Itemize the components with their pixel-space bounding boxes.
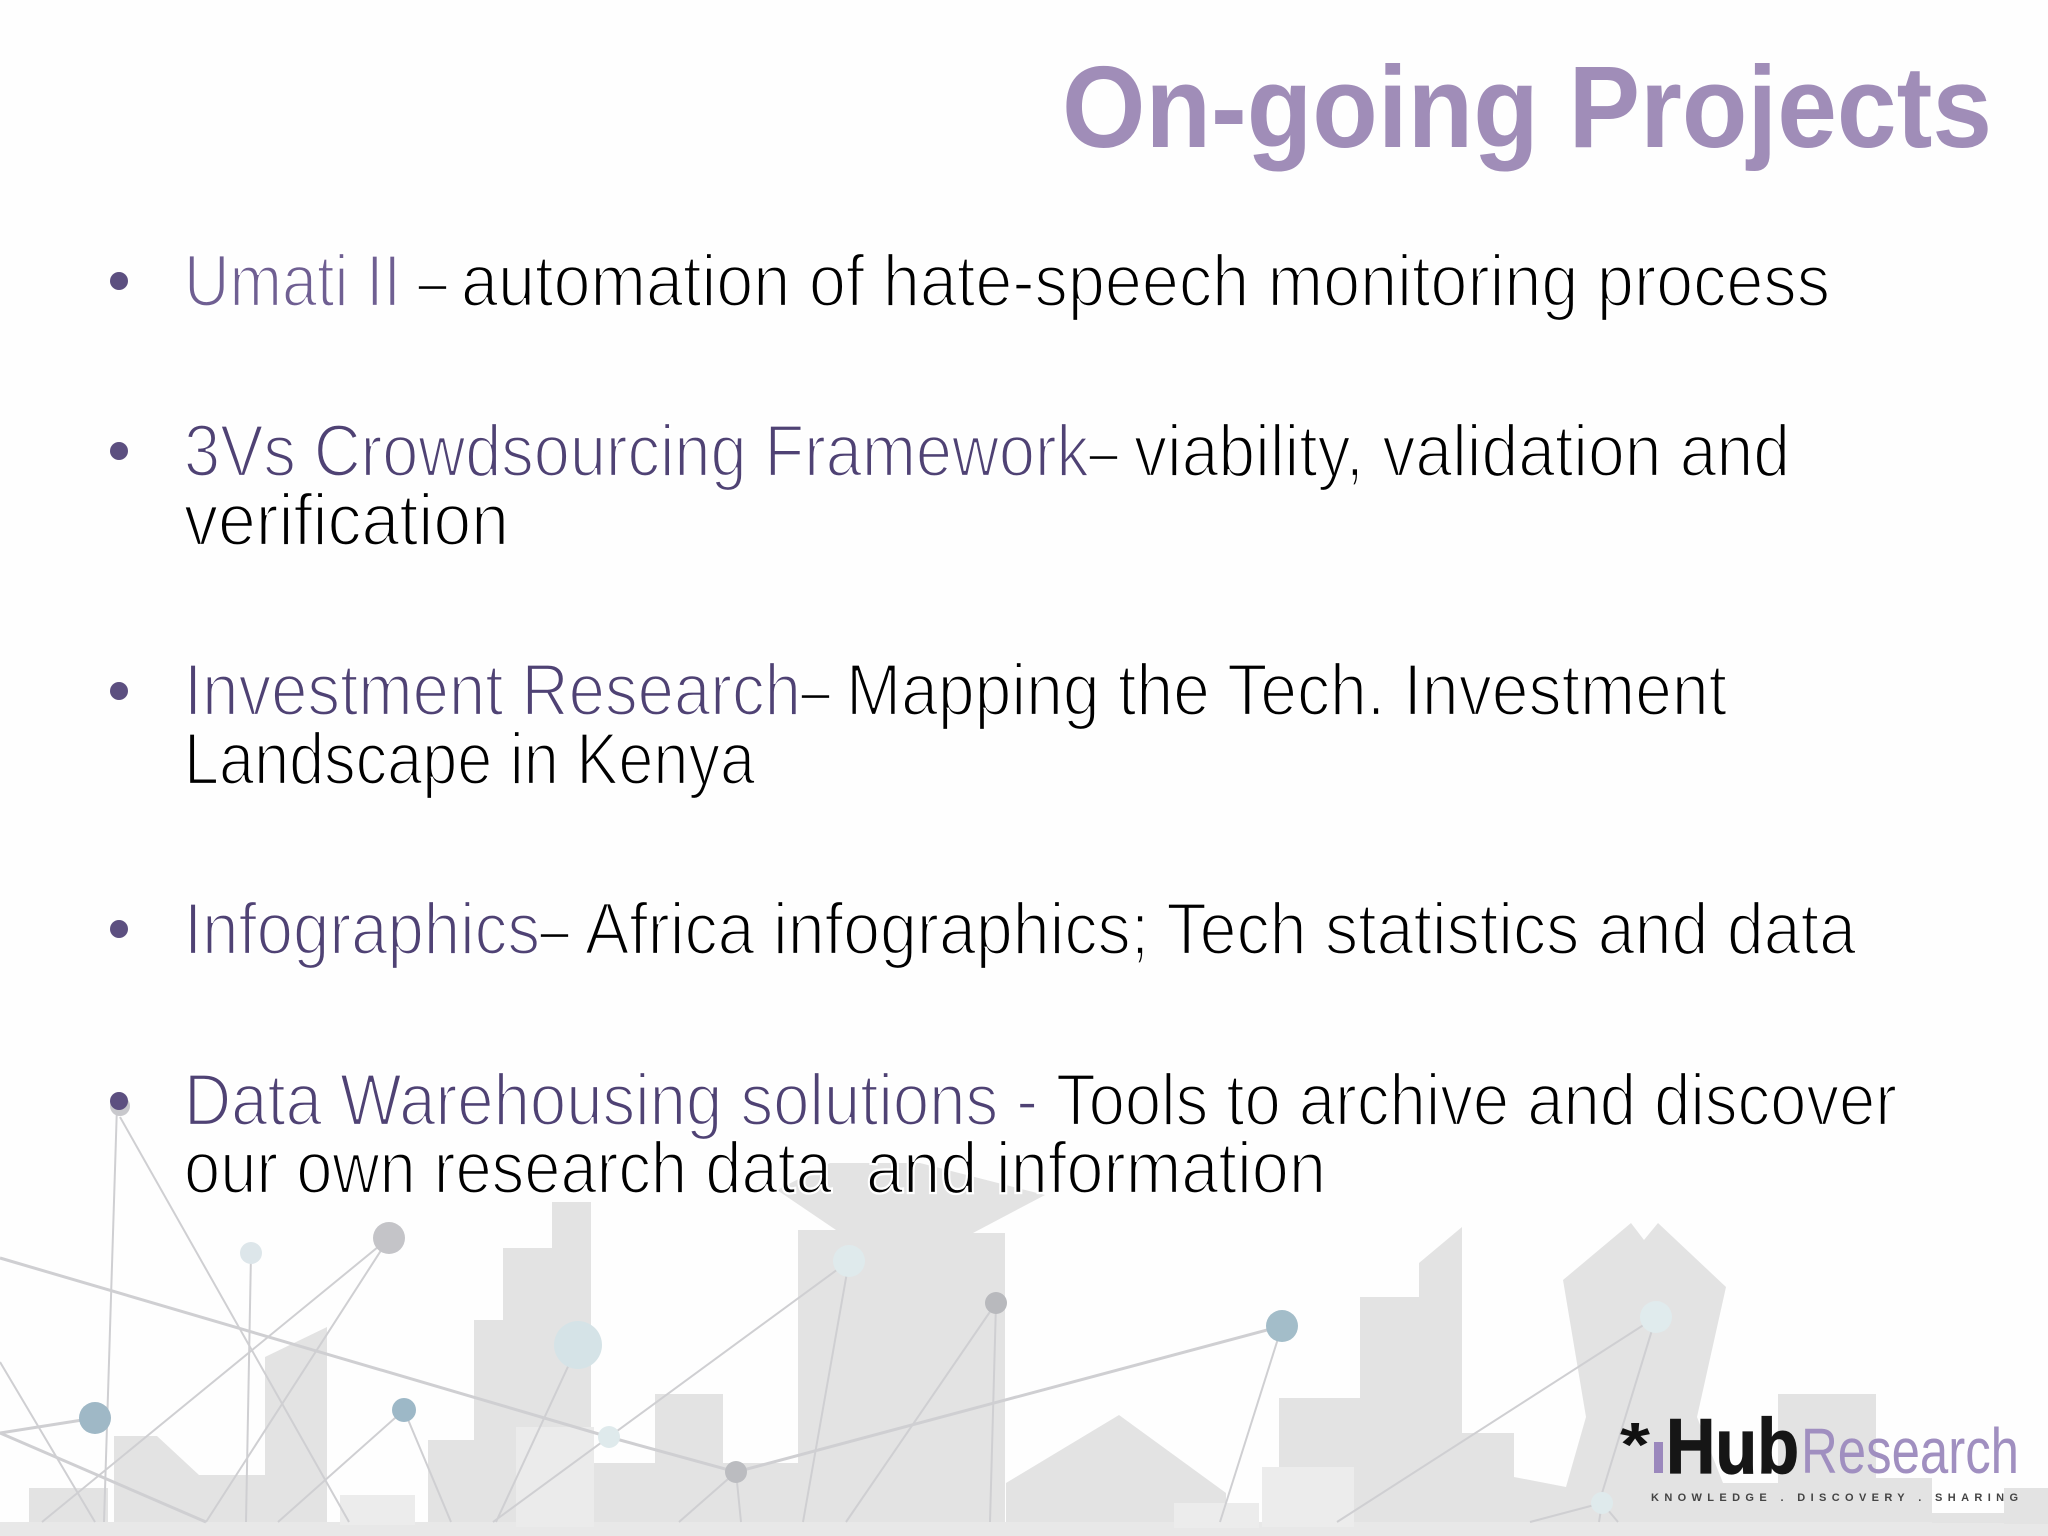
bullet item: Umati II: – (418, 241, 447, 322)
bullet item: Investment Research (110, 650, 1727, 800)
bullet item: Investment Research: Landscape in Kenya (184, 719, 755, 800)
bullet item: Data Warehousing solutions: Tools to archive and discover (1056, 1060, 1897, 1141)
bullet item: Infographics: – (540, 889, 569, 970)
logo: iHub Research (1620, 1402, 2019, 1504)
network lines (0, 1105, 1656, 1522)
skyline background (0, 1163, 2048, 1536)
logo: iHub Research: * (1620, 1411, 1651, 1480)
network nodes (79, 1096, 1672, 1514)
bullet item: Umati II: automation of hate-speech monitoring process (461, 241, 1830, 322)
logo: iHub Research: KNOWLEDGE . DISCOVERY . SHARING (1651, 1492, 2018, 1504)
bullet item: Investment Research: Investment Research (184, 650, 801, 731)
bullet item: Investment Research: Mapping the Tech. Investment (846, 650, 1727, 731)
bullet item: Data Warehousing solutions: our own research data (184, 1128, 832, 1209)
bullet item: Infographics: Africa infographics; Tech statistics and data (585, 889, 1856, 970)
logo: iHub Research: Hub (1666, 1402, 1799, 1490)
bullet item: Investment Research: – (801, 650, 830, 731)
bullet item: Umati II: Umati II (184, 241, 401, 322)
bullet item: 3Vs Crowdsourcing Framework: 3Vs Crowdsourcing Framework (184, 411, 1089, 492)
bullet item: Data Warehousing solutions (110, 1060, 1897, 1209)
bullet item: 3Vs Crowdsourcing Framework (110, 411, 1790, 561)
bullet item: Infographics: Infographics (184, 889, 540, 970)
bullet item: 3Vs Crowdsourcing Framework: viability, validation and (1134, 411, 1790, 492)
bullet item: Data Warehousing solutions: Data Warehousing solutions - (184, 1060, 1038, 1141)
bullet item: Data Warehousing solutions: and information (866, 1128, 1326, 1209)
bullet item: 3Vs Crowdsourcing Framework: verification (184, 480, 509, 561)
bullet item: 3Vs Crowdsourcing Framework: – (1089, 411, 1118, 492)
bullet item: Infographics (110, 889, 1856, 970)
title: On-going Projects (1062, 42, 1992, 172)
